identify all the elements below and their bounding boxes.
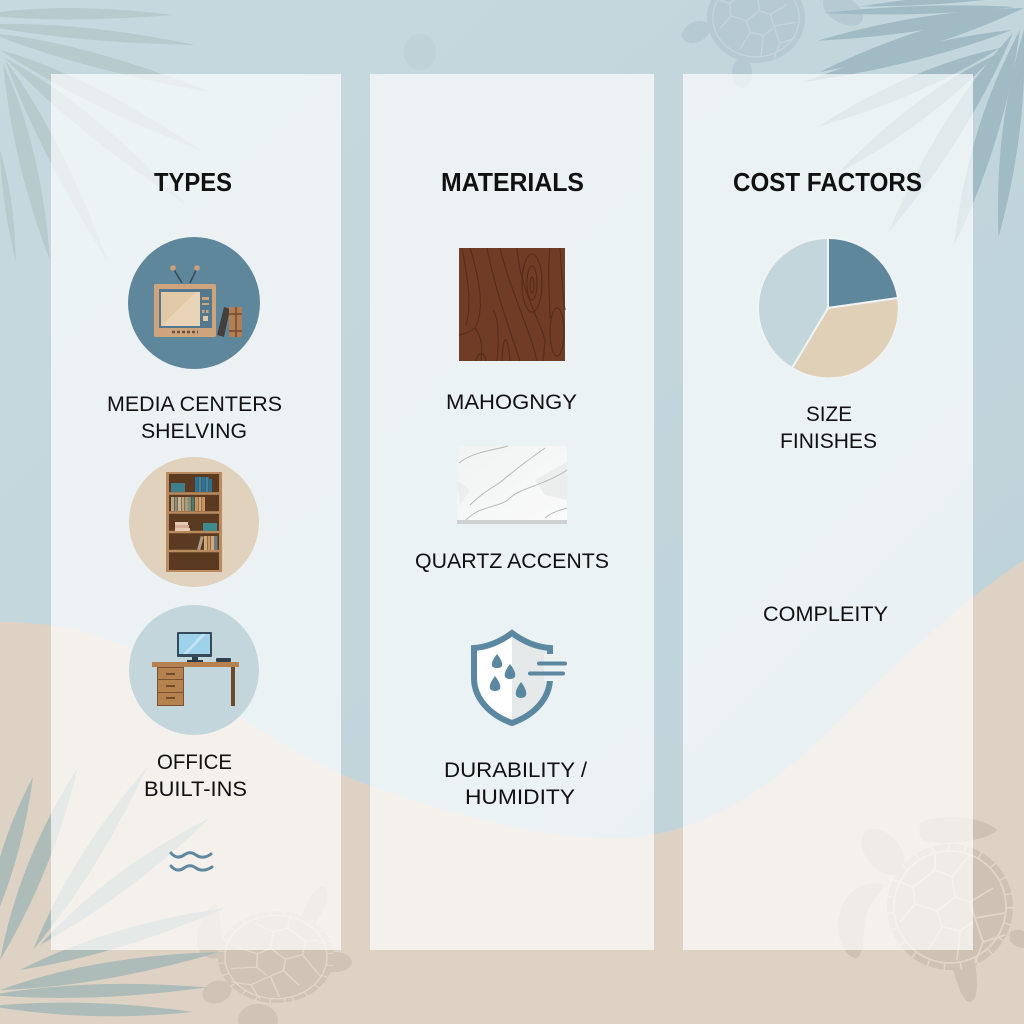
label: finishes: FINISHES xyxy=(780,430,877,453)
heading: materials: MATERIALS xyxy=(441,167,584,197)
turtle: bottom right xyxy=(838,817,1024,1002)
label: quartz accents: QUARTZ ACCENTS xyxy=(415,550,609,573)
faint shape: top centre xyxy=(404,34,436,70)
panel: materials xyxy=(370,74,654,950)
chart: cost factors pie xyxy=(758,238,899,378)
palm frond: top right xyxy=(801,0,1024,248)
swatch: quartz xyxy=(457,446,567,524)
label: mahogany: MAHOGNGY xyxy=(446,391,577,414)
label: size: SIZE xyxy=(806,403,852,426)
heading: cost factors: COST FACTORS xyxy=(733,167,922,197)
label: complexity: COMPLEITY xyxy=(763,603,888,626)
swatch: mahogany wood xyxy=(459,248,565,361)
icon: office desk xyxy=(129,605,259,735)
icon: media center xyxy=(128,237,260,369)
background: sand wave xyxy=(0,560,1024,1024)
panel: types xyxy=(51,74,341,950)
icon: bookshelf xyxy=(129,457,259,587)
turtle: bottom left xyxy=(197,883,352,1024)
turtle: top xyxy=(678,0,869,88)
panel: cost factors xyxy=(683,74,973,950)
label: built-ins: BUILT-INS xyxy=(144,778,247,801)
heading: types: TYPES xyxy=(154,167,232,197)
palm frond: bottom left xyxy=(0,763,227,1019)
label: office: OFFICE xyxy=(157,751,232,774)
icon: humidity shield xyxy=(474,633,569,723)
label: humidity: HUMIDITY xyxy=(465,786,575,809)
palm frond: top left xyxy=(0,8,214,265)
label: durability: DURABILITY / xyxy=(444,759,587,782)
icon: waves xyxy=(171,853,212,870)
label: shelving: SHELVING xyxy=(141,420,247,443)
label: media centers: MEDIA CENTERS xyxy=(107,393,282,416)
